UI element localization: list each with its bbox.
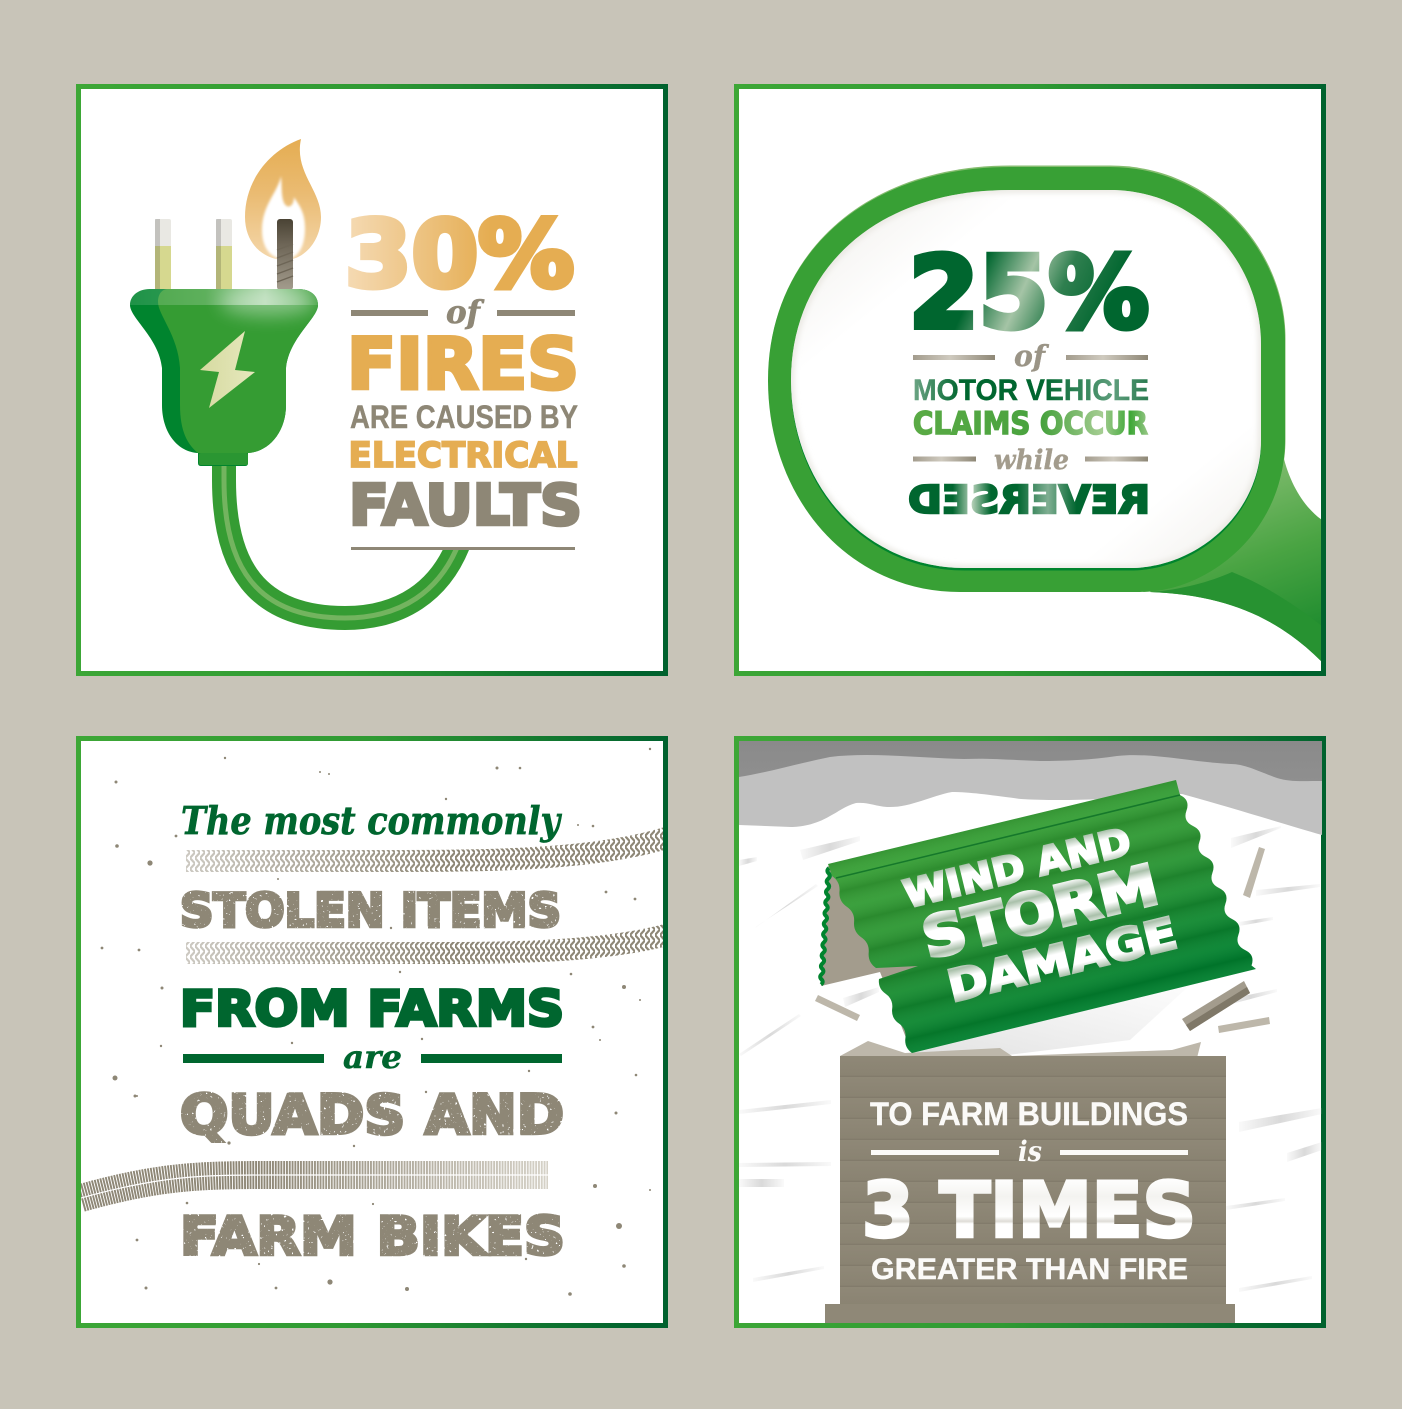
divider: of: of: [1014, 339, 1049, 373]
text: CLAIMS OCCUR: CLAIMS OCCUR: [913, 406, 1148, 442]
roof shadow: [915, 1002, 1160, 1054]
tyre track top: [186, 838, 666, 861]
storm sky: [739, 741, 1322, 835]
text: ARE CAUSED BY: ARE CAUSED BY: [350, 399, 578, 435]
debris: [815, 847, 1270, 1033]
divider: are: are: [343, 1038, 402, 1076]
text: The most commonly: The most commonly: [181, 798, 563, 843]
tyre track middle: [186, 935, 666, 953]
divider: of: [913, 339, 1148, 373]
building wall: [825, 1041, 1235, 1323]
icon: lightning bolt: [200, 331, 255, 408]
panel: wind and storm damage: [736, 738, 1324, 1326]
panel: electrical fires: [78, 86, 666, 674]
divider: [351, 547, 575, 550]
icon: plug body: [130, 288, 318, 466]
statistic: 25%: 25%: [909, 236, 1149, 351]
roof: [820, 780, 1256, 1053]
text: STOLEN ITEMS: STOLEN ITEMS: [180, 884, 561, 938]
divider: is: [871, 1140, 1188, 1162]
text: MOTOR VEHICLE: MOTOR VEHICLE: [913, 374, 1149, 407]
bubble tail: [1150, 455, 1322, 662]
roof text: WIND AND: WIND AND: [899, 819, 1135, 917]
divider: while: [913, 445, 1148, 476]
text: GREATER THAN FIRE: GREATER THAN FIRE: [871, 1253, 1188, 1286]
text: ELECTRICAL: ELECTRICAL: [348, 436, 578, 476]
statistic: 30%: 30%: [345, 201, 574, 308]
text: FROM FARMS: FROM FARMS: [180, 980, 564, 1038]
panel: motor vehicle reversing: [736, 86, 1324, 674]
icon: flame: [245, 139, 321, 260]
divider: is: is: [1018, 1135, 1042, 1168]
dirt specks: [101, 748, 651, 1296]
mirrored text: REVERSED: REVERSED: [908, 478, 1150, 522]
divider: of: of: [446, 293, 485, 331]
infographic: [76, 84, 1326, 1328]
text: QUADS AND: QUADS AND: [180, 1084, 564, 1146]
divider: are: [183, 1038, 562, 1076]
roof text: STORM: STORM: [916, 853, 1165, 972]
text: 3 TIMES: 3 TIMES: [862, 1166, 1196, 1254]
panel: stolen items: [78, 738, 666, 1326]
icon: electric cord: [224, 460, 460, 618]
text: FARM BIKES: FARM BIKES: [180, 1206, 565, 1268]
text: TO FARM BUILDINGS: TO FARM BUILDINGS: [870, 1096, 1188, 1132]
divider: of: [351, 293, 575, 331]
wind streaks: [739, 826, 1322, 1292]
text: FIRES: FIRES: [347, 324, 579, 406]
divider: while: while: [994, 445, 1069, 476]
roof text: DAMAGE: DAMAGE: [943, 908, 1182, 1013]
speech bubble: [768, 166, 1322, 662]
text: FAULTS: FAULTS: [349, 474, 582, 538]
tyre track bottom: [81, 1175, 548, 1198]
icon: plug prongs: [155, 219, 293, 290]
